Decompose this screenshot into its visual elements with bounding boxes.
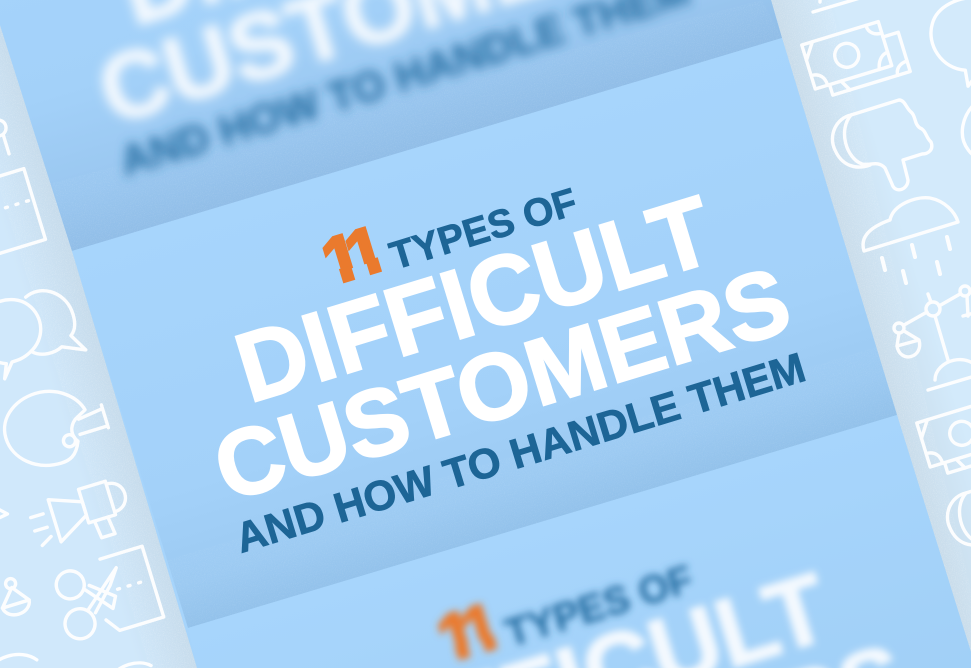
icon: left strip document — [0, 169, 45, 254]
icon: rain cloud — [863, 198, 958, 283]
icon: document with scissors — [49, 546, 164, 645]
grain band: right strip edge — [771, 0, 971, 652]
grain band: top panel lower edge — [52, 0, 782, 251]
panel: bottom repeated cover — [188, 415, 971, 668]
icon: money bills 2 — [917, 395, 971, 478]
grain band: center panel lower edge — [167, 347, 897, 628]
icon: scales pan — [0, 575, 32, 618]
icon: left strip partial triangle — [0, 501, 8, 520]
icon: football helmet — [0, 376, 114, 476]
title number 11: 11 — [313, 211, 393, 301]
icon: left strip partial scale — [0, 118, 14, 157]
title line: customers: CUSTOMERS — [203, 247, 801, 521]
left icon strip background — [0, 25, 197, 668]
icon: bottom arc — [109, 658, 151, 668]
icon: balance scale — [894, 286, 971, 390]
title number 11 — [322, 226, 382, 284]
panel: center cover — [72, 38, 897, 628]
icon: money bills — [802, 17, 910, 100]
icon: chat bubbles — [0, 281, 87, 383]
icon: bottom left arc — [0, 648, 37, 668]
blurred title: bottom panel — [432, 560, 896, 668]
icon: thumbs down — [832, 100, 932, 190]
grain band: left strip edge — [0, 25, 197, 668]
title line: difficult: DIFFICULT — [223, 174, 725, 423]
blurred title: bottom panel: TYPES OF — [500, 558, 698, 655]
icon: megaphone — [27, 477, 135, 556]
right icon strip background — [771, 0, 971, 652]
title line: and how to handle them: AND HOW TO HANDLE THEM — [230, 343, 811, 562]
title: center panel — [218, 188, 806, 554]
icon: right edge thumb — [954, 101, 971, 167]
icon: balance scale top repeat — [813, 0, 870, 12]
icon: thumbs down 2 — [947, 478, 971, 546]
panel: top repeated cover — [0, 0, 782, 251]
icon: top right speech bubble — [923, 0, 971, 92]
title line: types of: TYPES OF — [385, 181, 582, 278]
